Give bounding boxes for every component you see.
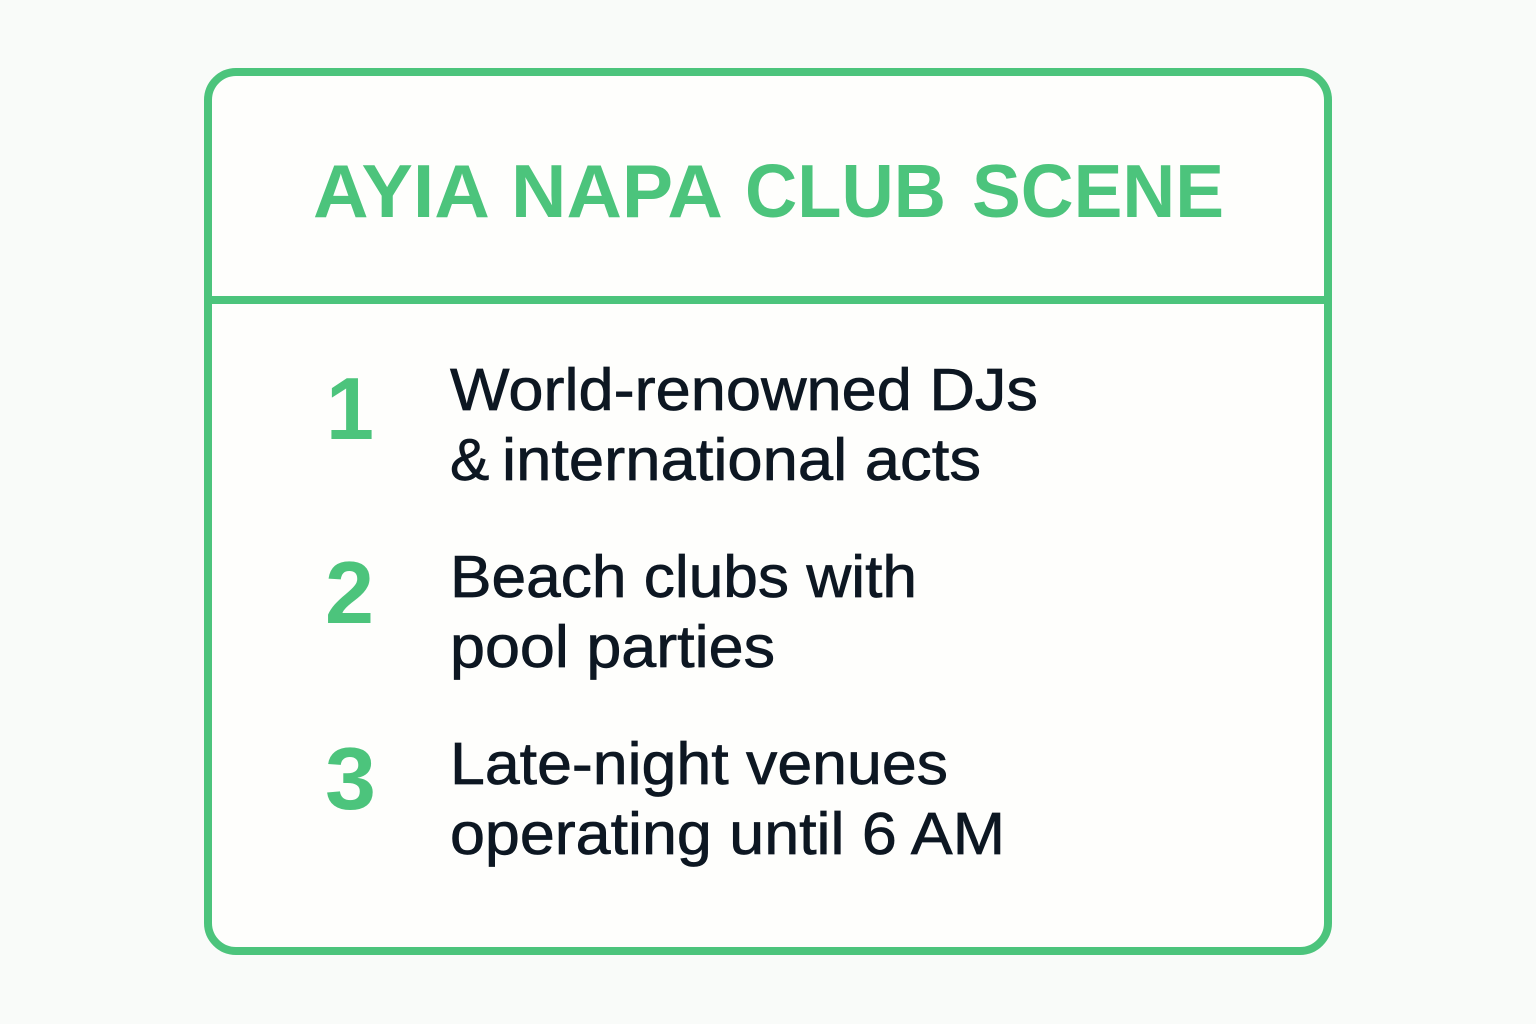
panel: club scene card [208,72,1328,951]
title: CLUB [745,149,946,233]
list item 1 [326,357,1038,493]
item 2 text: pool parties [450,614,775,680]
item 3 text: operating until 6 AM [450,801,1005,867]
item 2 text: Beach clubs with [450,544,917,610]
list item 2 [325,543,917,680]
item 1 text: World-renowned DJs [450,357,1038,423]
list item 3 [325,729,1005,867]
number 3: 3 [325,729,376,828]
title: AYIA [313,149,489,233]
item 3 text: Late-night venues [450,731,948,797]
title: SCENE [972,149,1224,233]
item 1 text: & [450,427,489,493]
number 1: 1 [326,359,374,458]
item 1 text: international acts [502,427,981,493]
number 2: 2 [325,543,374,642]
title: NAPA [511,149,722,233]
